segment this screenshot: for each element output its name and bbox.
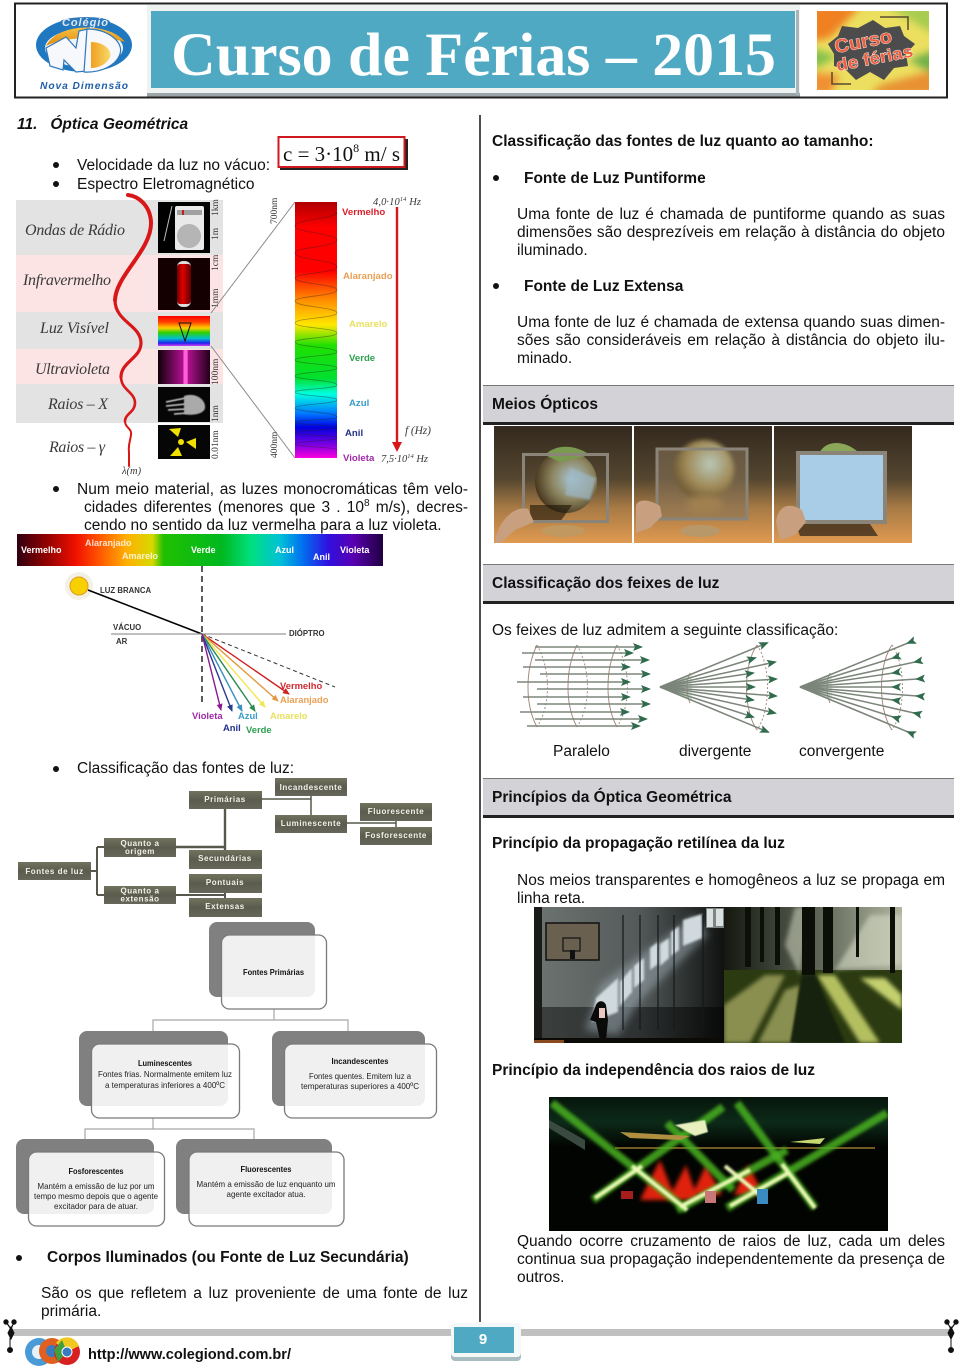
ornament: left (4, 1320, 16, 1352)
colour labels: Verde (349, 353, 375, 364)
beam: convergent (800, 643, 917, 732)
card: Fluorescentes (176, 1139, 344, 1226)
wavelength scale: 1cm (211, 254, 221, 271)
wavelength scale: 1mm (211, 288, 221, 308)
beam caption: convergent: convergente (799, 743, 884, 760)
text block: monochromatic light speeds: cidades diferentes (menores que 3 . 108 m/s), decres- (84, 498, 468, 516)
band names: Ondas de Rádio (25, 222, 125, 239)
footer url: http://www.colegiond.com.br/ (88, 1346, 292, 1363)
card: Fosforescentes: Fosforescentes (68, 1166, 124, 1176)
tree: light source classification: Secundárias (198, 854, 252, 863)
refraction diagram: Verde (246, 724, 272, 735)
frequency arrow: 14 (400, 196, 407, 203)
band names: λ(m) (121, 466, 142, 477)
section band: principles: Princípios da Óptica Geométrica (492, 789, 731, 806)
card: Fluorescentes: Mantém a emissão de luz enquanto um (196, 1179, 336, 1189)
tree: light source classification: Pontuais (206, 878, 244, 887)
refraction diagram: Alaranjado (280, 694, 329, 705)
text: beam intro: Os feixes de luz admitem a seguinte classificação: (492, 622, 838, 639)
wavelength wave (115, 195, 151, 466)
tree: light source classification: Fosforescente (365, 831, 427, 840)
card: Fosforescentes: Mantém a emissão de luz por um (38, 1181, 154, 1191)
text block: extended source: minado. (517, 350, 572, 367)
wavelength scale: 100nm (211, 358, 221, 385)
x-ray hand icon (158, 387, 210, 422)
logo: Colégio ND Nova Dimensão: Colégio (62, 17, 108, 29)
text block: point source (493, 170, 945, 259)
section band: principles (483, 778, 954, 818)
colour labels: Alaranjado (343, 271, 393, 282)
bullet list: speed of light and spectrum: Espectro Eletromagnético (77, 176, 254, 193)
text block: rectilinear propagation: linha reta. (517, 890, 585, 907)
card: Fosforescentes: tempo mesmo depois que o agente (34, 1191, 158, 1201)
logo: Curso de férias (817, 11, 929, 90)
text block: monochromatic light speeds (53, 481, 468, 534)
text block: independence of rays: continua sua propagação independentemente da presença de (517, 1251, 945, 1268)
tree: light source classification: Fluorescente (368, 807, 424, 816)
logo: Colégio ND Nova Dimensão: Nova Dimensão (40, 81, 128, 92)
card: Fluorescentes: Fluorescentes (240, 1164, 292, 1174)
band names: Raios – X (47, 396, 109, 413)
wavelength scale: 400nm (270, 431, 280, 458)
text block: illuminated bodies (16, 1249, 468, 1320)
refraction diagram: Azul (238, 710, 258, 721)
radio icon (158, 202, 210, 253)
section band: optical media (483, 385, 954, 425)
tree: light source classification: Fontes de luz (25, 867, 84, 876)
card: Fosforescentes (16, 1139, 164, 1226)
frequency arrow (373, 196, 431, 465)
bullet list: speed of light and spectrum: Velocidade da luz no vácuo: (77, 157, 270, 174)
text block: independence of rays: Quando ocorre cruzamento de raios de luz, cada um deles (517, 1233, 945, 1250)
diagram labels: LUZ BRANCA (100, 586, 151, 595)
card: Incandescentes (272, 1031, 436, 1118)
rainbow bar: Azul (275, 545, 294, 555)
logo: Curso de férias: Curso (833, 26, 894, 58)
page number badge (451, 1323, 521, 1361)
heading: independence of rays: Princípio da independência dos raios de luz (492, 1062, 815, 1079)
rainbow bar: Alaranjado (85, 538, 132, 548)
text block: rectilinear propagation (517, 872, 945, 907)
band names (22, 222, 142, 477)
rainbow bar: Anil (313, 552, 330, 562)
text block: point source: dimensões são desprezíveis em relação à distância do objeto (517, 224, 945, 241)
page number badge: 9 (479, 1331, 487, 1348)
beam: parallel (517, 645, 649, 727)
heading: classification by size: Classificação das fontes de luz quanto ao tamanho: (492, 133, 874, 150)
section band: optical media: Meios Ópticos (492, 396, 598, 413)
frequency arrow: 4,0·10 (373, 197, 400, 208)
refraction diagram: Vermelho (280, 680, 322, 691)
photo: globe behind transparent glass (494, 426, 632, 543)
tree: light source classification: Extensas (205, 902, 245, 911)
refraction diagram: Violeta (192, 710, 223, 721)
tree: light source classification (18, 778, 432, 917)
photo: globe behind translucent glass (634, 426, 772, 543)
refraction diagram: Anil (223, 722, 241, 733)
wavelength scale: 1nm (211, 404, 221, 422)
section title: 11. Óptica Geométrica (17, 116, 188, 133)
diagram labels (100, 586, 325, 646)
tree: light source classification: Primárias (204, 795, 246, 804)
tree: light source classification: origem (125, 847, 155, 856)
card: Luminescentes: a temperaturas inferiores a 400ºC (105, 1080, 225, 1090)
photo: globe behind opaque glass (774, 426, 912, 543)
colour labels: Amarelo (349, 319, 388, 330)
text block: extended source: sões são consideráveis em relação à distância do objeto ilu- (517, 332, 945, 349)
ornament: right (945, 1320, 958, 1352)
bullet: light source classification: Classificação das fontes de luz: (77, 760, 294, 777)
diagram labels: AR (116, 637, 128, 646)
colour labels (342, 207, 393, 464)
electromagnetic spectrum chart (16, 195, 431, 477)
text block: monochromatic light speeds: Num meio material, as luzes monocromáticas têm velo- (77, 481, 468, 498)
formula box: m/ s (359, 142, 400, 166)
text block: extended source: Fonte de Luz Extensa (524, 278, 683, 295)
column divider (479, 115, 481, 1322)
beam caption: parallel: Paralelo (553, 743, 610, 760)
wavelength scale (211, 197, 280, 459)
ultraviolet icon (158, 350, 210, 384)
text block: monochromatic light speeds: cendo no sentido da luz vermelha para a luz violeta. (84, 517, 442, 534)
card: Luminescentes: Fontes frias. Normalmente emitem luz (98, 1069, 232, 1079)
colour labels: Vermelho (342, 207, 385, 218)
card: Fosforescentes: excitador para de atuar. (54, 1201, 138, 1211)
refraction diagram: Amarelo (270, 710, 308, 721)
frequency arrow: 7,5·10 (381, 454, 407, 465)
section band: beam classification (483, 564, 954, 604)
card: Incandescentes: Incandescentes (332, 1056, 389, 1066)
text block: extended source: Uma fonte de luz é chamada de extensa quando suas dimen- (517, 314, 945, 331)
wavelength scale: 700nm (270, 197, 280, 224)
title banner: Curso de Férias – 2015 (171, 22, 776, 89)
radiation icon (158, 425, 210, 459)
rainbow bar: Amarelo (122, 551, 159, 561)
frequency arrow: 14 (407, 453, 414, 460)
connectors: primary sources (85, 1009, 348, 1139)
rainbow bar: Verde (191, 545, 216, 555)
band names: Infravermelho (22, 272, 111, 289)
photo: light in forest (724, 907, 902, 1043)
rainbow bar: Violeta (340, 545, 370, 555)
bullet list: speed of light and spectrum (53, 157, 270, 193)
frequency arrow: f (Hz) (405, 425, 431, 437)
card: Luminescentes (79, 1031, 240, 1118)
photo: light in gymnasium (534, 907, 724, 1043)
rainbow bar: Vermelho (21, 545, 62, 555)
tree: light source classification: Quanto a (120, 886, 160, 896)
rainbow bar (17, 534, 383, 566)
diagram labels: DIÓPTRO (289, 629, 325, 638)
text block: illuminated bodies: Corpos Iluminados (ou Fonte de Luz Secundária) (47, 1249, 409, 1266)
diagram labels: VÁCUO (113, 623, 141, 632)
band names: Luz Visível (39, 320, 110, 337)
colour labels: Violeta (343, 453, 375, 464)
visible spectrum bar (295, 202, 337, 458)
infrared lamp icon (158, 258, 210, 310)
card: Fontes Primárias (209, 922, 326, 1009)
logo: Curso de férias: de férias (835, 42, 915, 75)
header band (15, 4, 947, 98)
text block: extended source (493, 278, 945, 367)
formula box: c = 3·10 (283, 142, 353, 166)
colour labels: Azul (349, 398, 369, 409)
text block: independence of rays (517, 1233, 945, 1286)
card: Luminescentes: Luminescentes (138, 1058, 192, 1068)
tree: light source classification: extensão (120, 894, 160, 904)
refracted rays (202, 634, 289, 711)
text block: illuminated bodies: São os que refletem a luz proveniente de uma fonte de luz (41, 1285, 468, 1302)
colour labels: Anil (345, 428, 363, 439)
text block: independence of rays: outros. (517, 1269, 564, 1286)
band names: Ultravioleta (35, 361, 110, 378)
text block: rectilinear propagation: Nos meios transparentes e homogêneos a luz se propaga em (517, 872, 945, 889)
heading: rectilinear propagation: Princípio da propagação retilínea da luz (492, 835, 785, 852)
text block: point source: iluminado. (517, 242, 588, 259)
text block: illuminated bodies: primária. (41, 1303, 101, 1320)
tree: light source classification: Luminescente (281, 819, 341, 828)
tree: light source classification: Incandescente (280, 783, 342, 792)
logo: Colégio ND Nova Dimensão (36, 17, 132, 92)
wavelength scale: 1km (211, 198, 221, 216)
card: Incandescentes: Fontes quentes. Emitem luz a (309, 1071, 411, 1081)
card: Fontes Primárias: Fontes Primárias (243, 967, 304, 977)
frequency arrow: Hz (406, 197, 421, 208)
photo: crossing stage light beams (549, 1097, 888, 1231)
band names: Raios – γ (48, 439, 106, 456)
formula box: 8 (353, 141, 359, 155)
formula box (278, 137, 408, 170)
beam: divergent (660, 643, 776, 732)
text block: point source: Fonte de Luz Puntiforme (524, 170, 706, 187)
wavelength scale: 0.01nm (211, 430, 221, 459)
text block: point source: Uma fonte de luz é chamada de puntiforme quando as suas (517, 206, 945, 223)
section band: beam classification: Classificação dos feixes de luz (492, 575, 719, 592)
frequency arrow: Hz (414, 454, 428, 465)
tree: light source classification: Quanto a (120, 839, 160, 848)
icon: sun (65, 572, 93, 600)
card: Incandescentes: temperaturas superiores a 400ºC (301, 1081, 419, 1091)
visible light icon (158, 316, 210, 346)
icon: browser logos (25, 1337, 80, 1366)
card: Fluorescentes: agente excitador atua. (226, 1189, 306, 1199)
beam caption: divergent: divergente (679, 743, 751, 760)
wavelength scale: 1m (211, 227, 221, 240)
footer rule (4, 1320, 958, 1352)
refraction diagram (65, 566, 335, 735)
